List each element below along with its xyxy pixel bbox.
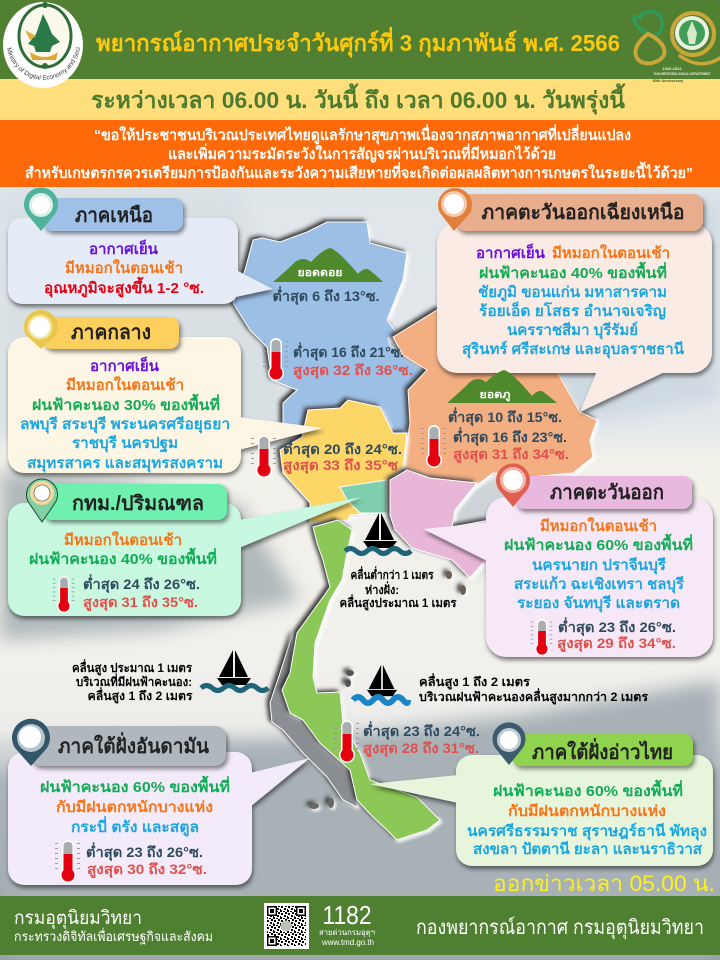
andaman pin icon: [12, 719, 50, 766]
map: northeast region: [393, 300, 597, 485]
north text: อุณหภูมิจะสูงขึ้น 1-2 °ซ.: [44, 276, 204, 298]
map label: north peak: ต่ำสุด 6 ถึง 13°ซ.: [272, 286, 380, 305]
northeast callout bubble: [437, 223, 712, 412]
bangkok heading pill: [43, 484, 227, 520]
northeast heading: ภาคตะวันออกเฉียงเหนือ: [482, 201, 684, 224]
map: gulf coast: [282, 520, 440, 840]
central heading: ภาคกลาง: [71, 322, 151, 344]
panel: south andaman: [8, 719, 310, 885]
map label: south temperature: [334, 720, 480, 763]
north text: มีหมอกในตอนเช้า: [65, 259, 183, 277]
advisory band: “ขอให้ประชาชนบริเวณประเทศไทยดูแลรักษาสุขภาพเนื่องจากสภาพอากาศที่เปลี่ยนแปลง: [94, 124, 631, 145]
map: islands: [309, 571, 466, 809]
andaman temperature: [55, 840, 207, 883]
hotline: [319, 900, 375, 947]
north text: อากาศเย็น: [89, 239, 159, 258]
bangkok temperature: [53, 574, 200, 613]
map of Thailand regions: [233, 222, 597, 840]
east callout bubble: [423, 497, 713, 657]
map label: north peak: ยอดดอย: [298, 267, 342, 279]
northeast text: [462, 243, 685, 359]
east text: นครนายก ปราจีนบุรี: [532, 557, 667, 575]
andaman text: ฝนฟ้าคะนอง 60% ของพื้นที่: [40, 775, 230, 796]
QR code: [264, 903, 309, 949]
bangkok text: ฝนฟ้าคะนอง 40% ของพื้นที่: [29, 547, 217, 568]
sea forecast: gulf upper: คลื่นต่ำกว่า 1 เมตร: [350, 566, 434, 582]
northeast text: นครราชสีมา บุรีรัมย์: [507, 321, 638, 340]
central text: ราชบุรี นครปฐม: [72, 435, 178, 453]
central heading pill: [43, 317, 179, 349]
map label: central temperature: สูงสุด 33 ถึง 35°ซ: [283, 457, 399, 474]
map: east region: [390, 470, 490, 578]
east heading: ภาคตะวันออก: [550, 482, 664, 504]
east text: สระแก้ว ฉะเชิงเทรา ชลบุรี: [514, 575, 685, 594]
icon: 80th anniversary logo: 80th Anniversary: [653, 79, 684, 83]
central text: อากาศเย็น: [90, 356, 160, 375]
andaman temperature: สูงสุด 30 ถึง 32°ซ.: [87, 861, 207, 878]
andaman text: กระบี่ ตรัง และสตูล: [71, 816, 199, 837]
north text: [44, 239, 204, 298]
panel: northeast: [437, 188, 712, 412]
bangkok text: [29, 531, 217, 568]
issue time: ออกข่าวเวลา 05.00 น.: [493, 871, 715, 896]
hotline: สายด่วนกรมอุตุฯ: [319, 928, 375, 937]
sea forecast: andaman: คลื่นสูง 1 ถึง 2 เมตร: [88, 687, 193, 704]
east text: ฝนฟ้าคะนอง 60% ของพื้นที่: [504, 533, 693, 554]
map: bangkok region: [340, 480, 387, 513]
bangkok temperature: ต่ำสุด 24 ถึง 26°ซ.: [83, 574, 200, 593]
footer band: [0, 896, 720, 955]
map label: south temperature: ต่ำสุด 23 ถึง 24°ซ.: [363, 721, 480, 740]
northeast text: สุรินทร์ ศรีสะเกษ และอุบลราชธานี: [462, 340, 685, 359]
central text: [20, 356, 230, 473]
sea forecast: gulf upper: คลื่นสูงประมาณ 1 เมตร: [340, 594, 457, 611]
central text: สมุทรสาคร และสมุทรสงคราม: [27, 455, 223, 473]
northeast text: ฝนฟ้าคะนอง 40% ของพื้นที่: [479, 261, 667, 282]
map label: north temperature: ต่ำสุด 16 ถึง 21°ซ.: [293, 342, 404, 361]
map label: northeast peak and temperature: ยอดภู: [480, 389, 511, 402]
andaman heading: ภาคใต้ฝั่งอันดามัน: [58, 731, 209, 758]
central pin icon: [24, 310, 58, 349]
title: พยากรณ์อากาศประจำวันศุกร์ที่ 3 กุมภาพันธ์ พ.ศ. 2566: [96, 26, 620, 58]
gulf pin icon: [492, 722, 526, 765]
map label: central temperature: [251, 435, 402, 478]
advisory band: [0, 120, 720, 187]
header band: [0, 0, 720, 79]
panel: bangkok and vicinity: [8, 479, 362, 616]
east text: ระยอง จันทบุรี และตราด: [517, 595, 680, 613]
bangkok pin icon: [26, 479, 58, 522]
northeast text: อากาศเย็น: [476, 243, 546, 262]
andaman text: กับมีฝนตกหนักบางแห่ง: [56, 799, 213, 816]
gulf heading pill: [512, 734, 693, 766]
hotline: 1182: [322, 900, 372, 930]
gulf heading: ภาคใต้ฝั่งอ่าวไทย: [532, 737, 673, 764]
sea forecast: gulf upper: ห่างฝั่ง:: [365, 581, 399, 597]
gulf callout bubble: [370, 755, 713, 866]
north heading: ภาคเหนือ: [75, 204, 153, 227]
gulf text: สงขลา ปัตตานี ยะลา และนราธิวาส: [473, 840, 703, 858]
map label: northeast peak and temperature: ต่ำสุด 10 ถึง 15°ซ.: [448, 407, 562, 426]
bangkok temperature: สูงสุด 31 ถึง 35°ซ.: [83, 594, 198, 611]
panel: north: [8, 187, 273, 304]
east pin icon: [496, 463, 530, 507]
sea forecast: gulf lower: [353, 665, 649, 705]
central text: มีหมอกในตอนเช้า: [66, 376, 184, 394]
east text: มีหมอกในตอนเช้า: [540, 517, 657, 535]
andaman text: [40, 775, 230, 837]
sea forecast: andaman: บริเวณที่มีฝนฟ้าคะนอง:: [76, 673, 192, 689]
northeast pin icon: [438, 188, 472, 231]
sea forecast: gulf lower: บริเวณฝนฟ้าคะนองคลื่นสูงมากกว่า 2 เมตร: [419, 688, 649, 705]
subtitle band: [0, 79, 720, 120]
map label: north temperature: [263, 338, 413, 381]
andaman heading pill: [30, 726, 226, 766]
sea forecast: andaman: คลื่นสูง ประมาณ 1 เมตร: [72, 659, 193, 676]
subtitle band: ระหว่างเวลา 06.00 น. วันนี้ ถึง เวลา 06.00 น. วันพรุ่งนี้: [91, 83, 626, 115]
map label: northeast peak and temperature: สูงสุด 31 ถึง 34°ซ.: [453, 446, 569, 463]
east temperature: [531, 617, 676, 656]
map label: north temperature: สูงสุด 32 ถึง 36°ซ.: [293, 362, 413, 379]
east temperature: ต่ำสุด 23 ถึง 26°ซ.: [558, 617, 676, 636]
map: andaman coast: [270, 633, 357, 807]
bangkok callout bubble: [8, 497, 362, 616]
sea forecast: gulf lower: คลื่นสูง 1 ถึง 2 เมตร: [419, 673, 531, 690]
northeast text: มีหมอกในตอนเช้า: [552, 244, 670, 262]
map: north region: [233, 222, 427, 440]
east temperature: สูงสุด 29 ถึง 34°ซ.: [557, 635, 676, 652]
icon: 80th anniversary logo: [634, 11, 720, 83]
gulf text: ฝนฟ้าคะนอง 60% ของพื้นที่: [493, 779, 683, 800]
map label: northeast peak and temperature: [421, 370, 569, 468]
sea forecast: andaman: [72, 650, 268, 704]
hotline: www.tmd.go.th: [321, 938, 374, 947]
panel: central: [8, 310, 323, 473]
map label: north peak: [272, 248, 383, 305]
map label: northeast peak and temperature: ต่ำสุด 16 ถึง 23°ซ.: [453, 427, 567, 446]
north heading pill: [43, 198, 183, 231]
gulf text: [467, 779, 707, 858]
andaman callout bubble: [8, 752, 310, 885]
footer department name: กระทรวงดิจิทัลเพื่อเศรษฐกิจและสังคม: [14, 928, 213, 945]
east heading pill: [515, 476, 692, 509]
gulf text: นครศรีธรรมราช สุราษฎร์ธานี พัทลุง: [467, 822, 707, 841]
gulf text: กับมีฝนตกหนักบางแห่ง: [508, 803, 666, 820]
northeast heading pill: [455, 194, 703, 231]
icon: 80th anniversary logo: 1942-2022: [662, 66, 682, 71]
central callout bubble: [8, 337, 323, 473]
central text: ฝนฟ้าคะนอง 30% ของพื้นที่: [32, 393, 220, 414]
footer department name: กรมอุตุนิยมวิทยา: [14, 908, 142, 930]
north pin icon: [24, 187, 58, 231]
andaman temperature: ต่ำสุด 23 ถึง 26°ซ.: [86, 842, 203, 861]
bangkok heading: กทม./ปริมณฑล: [72, 493, 204, 515]
footer department name: [14, 908, 213, 945]
map label: central temperature: ต่ำสุด 20 ถึง 24°ซ.: [283, 439, 402, 458]
advisory band: และเพิ่มความระมัดระวังในการสัญจรผ่านบริเวณที่มีหมอกไว้ด้วย: [168, 143, 556, 163]
advisory band: สำหรับเกษตรกรควรเตรียมการป้องกันและระวังความเสียหายที่จะเกิดต่อผลผลิตทางการเกษตรในระยะนี้ไว้ด้วย”: [25, 161, 693, 182]
panel: east: [423, 463, 713, 657]
sea forecast: gulf upper: [340, 513, 457, 611]
panel: south gulf: [370, 722, 713, 866]
east text: [504, 517, 693, 613]
bangkok text: มีหมอกในตอนเช้า: [64, 531, 182, 549]
map: central region: [280, 400, 407, 523]
north callout bubble: [8, 218, 273, 304]
northeast text: ชัยภูมิ ขอนแก่น มหาสารคาม: [478, 283, 667, 302]
central text: ลพบุรี สระบุรี พระนครศรีอยุธยา: [20, 416, 230, 434]
northeast text: ร้อยเอ็ด ยโสธร อำนาจเจริญ: [479, 301, 666, 320]
map label: south temperature: สูงสุด 28 ถึง 31°ซ.: [363, 740, 479, 757]
